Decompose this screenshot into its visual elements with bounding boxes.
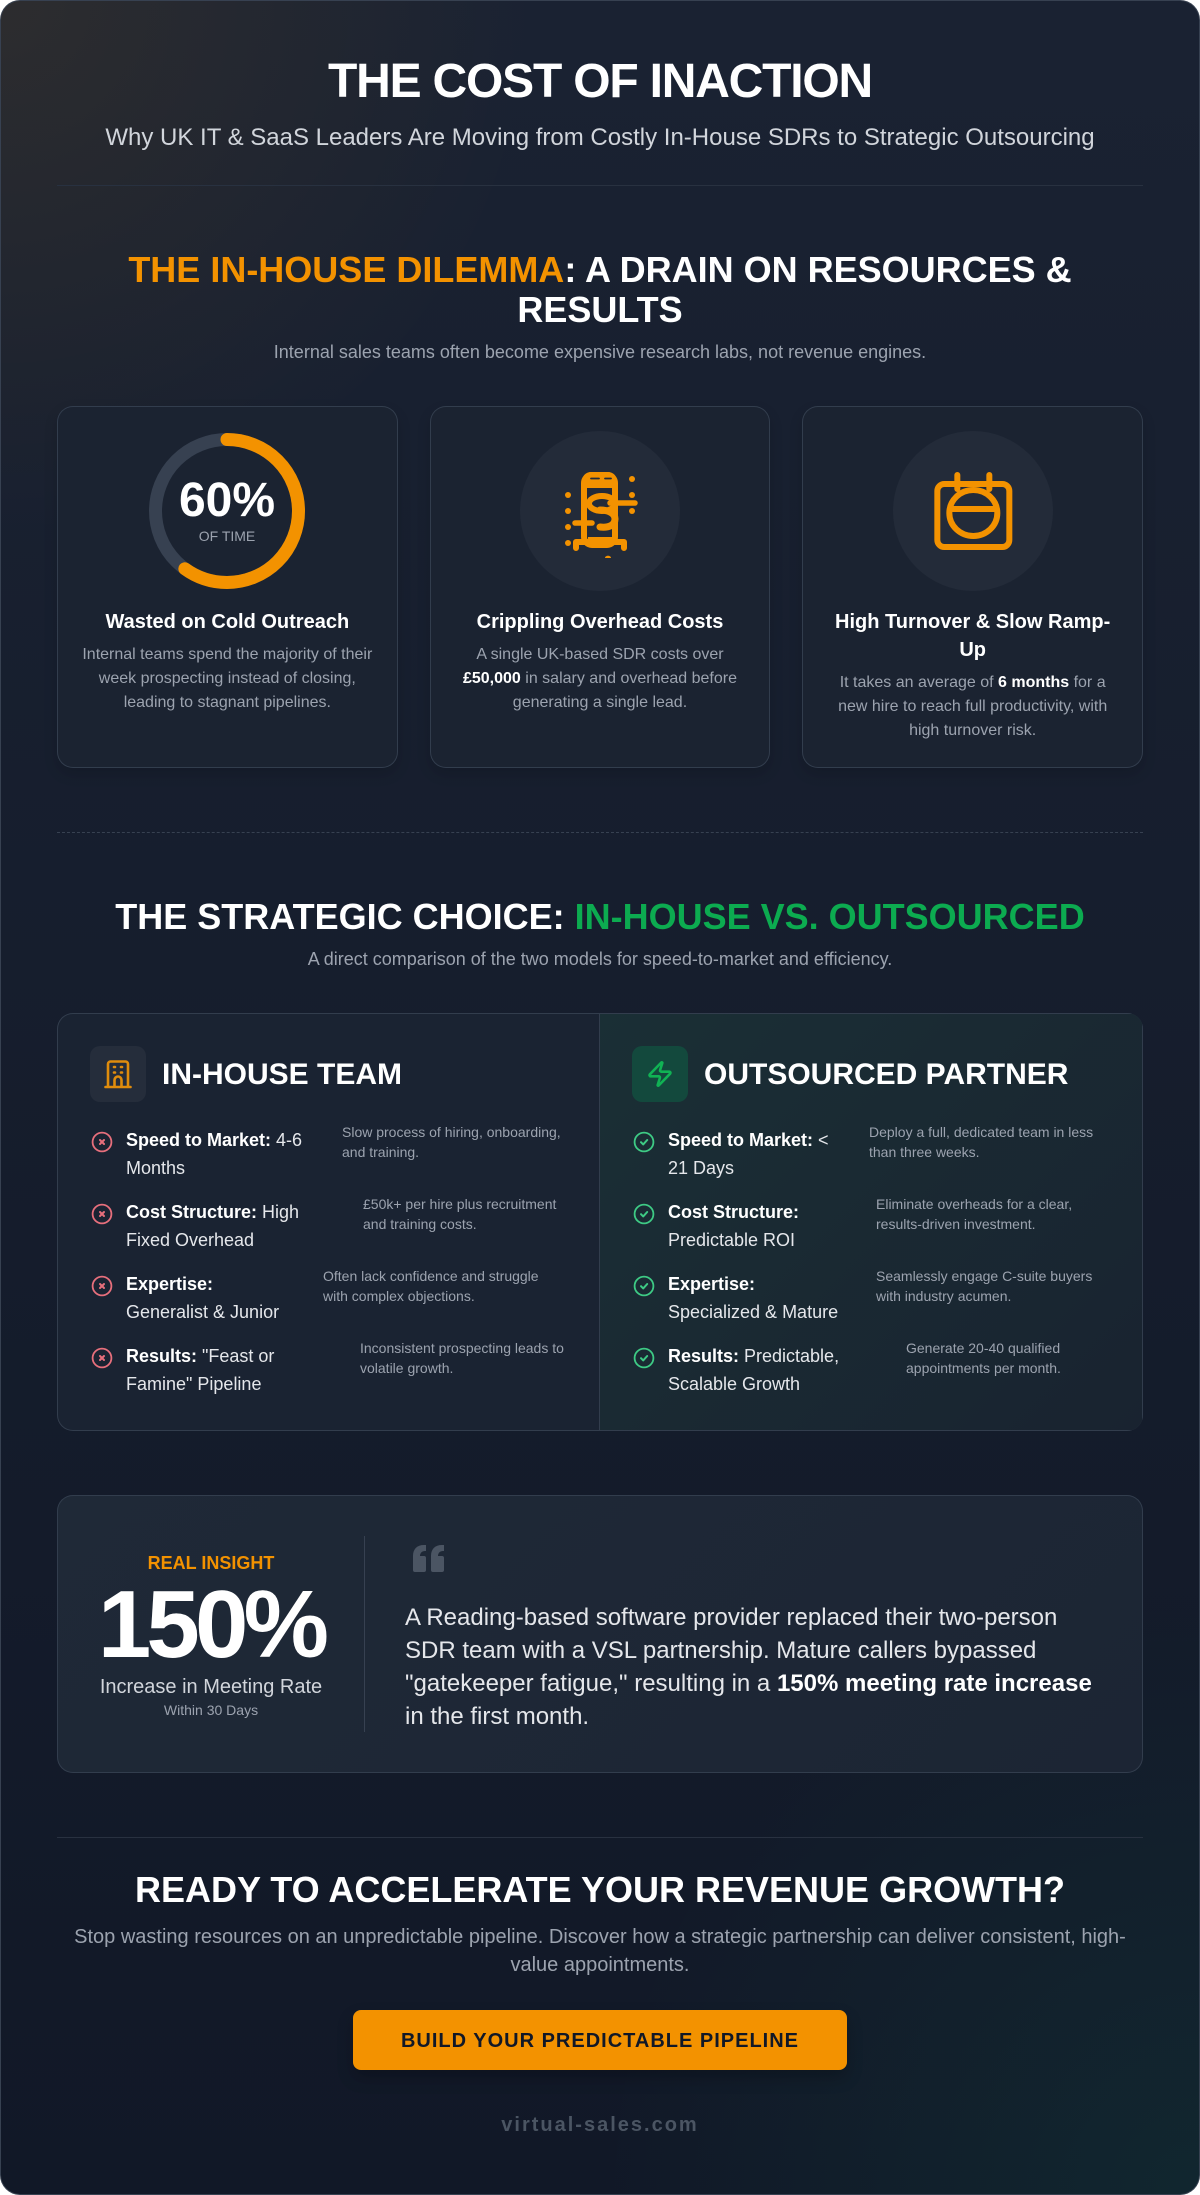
card text: A single UK-based SDR costs over xyxy=(476,646,724,663)
description xyxy=(363,1196,556,1232)
row: speed to market xyxy=(634,1124,1093,1178)
card title: High Turnover & Slow Ramp- xyxy=(835,611,1110,633)
panel: in-house team xyxy=(90,1046,564,1394)
icon: quote mark xyxy=(413,1545,444,1572)
icon: overhead cost xyxy=(520,431,680,591)
donut chart: 60% of time: OF TIME xyxy=(199,528,256,544)
label: Cost Structure: High xyxy=(126,1202,299,1222)
icon: cross xyxy=(92,1276,112,1296)
section subheading: Internal sales teams often become expensive research labs, not revenue engines. xyxy=(274,342,926,362)
panel heading: IN-HOUSE TEAM xyxy=(162,1058,402,1091)
heading: strategic choice: THE STRATEGIC CHOICE: IN-HOUSE VS. OUTSOURCED xyxy=(115,896,1085,937)
description: and training. xyxy=(342,1144,419,1160)
section subheading: A direct comparison of the two models for speed-to-market and efficiency. xyxy=(308,949,892,969)
description: appointments per month. xyxy=(906,1360,1061,1376)
subtitle: Why UK IT & SaaS Leaders Are Moving from Costly In-House SDRs to Strategic Outsourcing xyxy=(105,124,1095,151)
description: Often lack confidence and struggle xyxy=(323,1268,539,1284)
card text: week prospecting instead of closing, xyxy=(99,670,356,687)
description xyxy=(906,1340,1061,1376)
description: results-driven investment. xyxy=(876,1216,1036,1232)
row: cost structure xyxy=(634,1196,1072,1250)
quote text: in the first month. xyxy=(405,1703,589,1730)
card title: Up xyxy=(959,639,986,661)
label: Scalable Growth xyxy=(668,1374,800,1394)
description: than three weeks. xyxy=(869,1144,980,1160)
heading: call to action: READY TO ACCELERATE YOUR REVENUE GROWTH? xyxy=(135,1869,1065,1910)
description: and training costs. xyxy=(363,1216,477,1232)
label: Months xyxy=(126,1158,185,1178)
label: 21 Days xyxy=(668,1158,734,1178)
panel: wasted on cold outreach xyxy=(57,406,398,768)
description: volatile growth. xyxy=(360,1360,453,1376)
footer url: virtual-sales.com xyxy=(501,2114,699,2136)
call to action text: value appointments. xyxy=(510,1954,690,1976)
icon: building xyxy=(90,1046,146,1102)
row: cost structure xyxy=(92,1196,556,1250)
label: Famine" Pipeline xyxy=(126,1374,261,1394)
description: Eliminate overheads for a clear, xyxy=(876,1196,1072,1212)
panel heading: OUTSOURCED PARTNER xyxy=(704,1058,1068,1091)
call to action text: Stop wasting resources on an unpredictable pipeline. Discover how a strategic partnership can deliver consistent, high- xyxy=(74,1926,1126,1948)
card text: high turnover risk. xyxy=(909,722,1036,739)
quote text: A Reading-based software provider replaced their two-person xyxy=(405,1604,1057,1631)
label: Specialized & Mature xyxy=(668,1302,838,1322)
description: Inconsistent prospecting leads to xyxy=(360,1340,564,1356)
label xyxy=(126,1346,274,1394)
label: Expertise: xyxy=(668,1274,755,1294)
description xyxy=(876,1268,1092,1304)
description xyxy=(360,1340,564,1376)
card title: Crippling Overhead Costs xyxy=(477,611,723,633)
description: with industry acumen. xyxy=(876,1288,1011,1304)
description: £50k+ per hire plus recruitment xyxy=(363,1196,556,1212)
panel: comparison xyxy=(57,1013,1143,1431)
label xyxy=(126,1202,299,1250)
icon: cross xyxy=(92,1348,112,1368)
description: Seamlessly engage C-suite buyers xyxy=(876,1268,1092,1284)
row: expertise xyxy=(92,1268,539,1322)
label xyxy=(668,1202,799,1250)
description xyxy=(869,1124,1093,1160)
stat note: Within 30 Days xyxy=(164,1702,258,1718)
label xyxy=(126,1130,302,1178)
label xyxy=(668,1346,839,1394)
card text: leading to stagnant pipelines. xyxy=(124,694,331,711)
heading: in-house dilemma: RESULTS xyxy=(517,289,683,330)
icon: cross xyxy=(92,1132,112,1152)
card text: £50,000 in salary and overhead before xyxy=(463,670,737,687)
card text xyxy=(82,646,372,711)
donut chart: 60% of time xyxy=(149,433,305,589)
label xyxy=(668,1274,838,1322)
card text: It takes an average of 6 months for a xyxy=(840,674,1106,691)
button: BUILD YOUR PREDICTABLE PIPELINE xyxy=(401,2030,799,2052)
card title: Wasted on Cold Outreach xyxy=(105,611,349,633)
row: results xyxy=(634,1340,1061,1394)
panel: outsourced partner xyxy=(599,1013,1143,1431)
card text: new hire to reach full productivity, with xyxy=(838,698,1107,715)
label xyxy=(668,1130,829,1178)
description: with complex objections. xyxy=(323,1288,475,1304)
panel: high turnover and slow ramp-up xyxy=(802,406,1143,768)
icon: cross xyxy=(92,1204,112,1224)
card text xyxy=(838,674,1107,739)
description xyxy=(323,1268,539,1304)
stat block xyxy=(57,1535,365,1735)
icon: check xyxy=(634,1276,654,1296)
stat caption: Increase in Meeting Rate xyxy=(100,1676,322,1698)
label: Results: "Feast or xyxy=(126,1346,274,1366)
icon: check xyxy=(634,1132,654,1152)
big number: 150% xyxy=(98,1571,324,1678)
card text: Internal teams spend the majority of their xyxy=(82,646,372,663)
icon: check xyxy=(634,1204,654,1224)
icon: check xyxy=(634,1348,654,1368)
card text xyxy=(463,646,737,711)
title: THE COST OF INACTION xyxy=(328,55,872,108)
label: Generalist & Junior xyxy=(126,1302,279,1322)
panel: real insight xyxy=(57,1495,1143,1773)
label xyxy=(126,1274,279,1322)
label: Speed to Market: 4-6 xyxy=(126,1130,302,1150)
call to action text xyxy=(0,1923,1200,1979)
panel: crippling overhead costs xyxy=(430,406,770,768)
row: expertise xyxy=(634,1268,1092,1322)
label: REAL INSIGHT xyxy=(148,1553,274,1573)
heading: in-house dilemma xyxy=(128,249,1072,330)
card title xyxy=(835,611,1110,661)
label: Speed to Market: < xyxy=(668,1130,829,1150)
row: speed to market xyxy=(92,1124,561,1178)
donut chart: 60% of time: 60% xyxy=(179,474,275,527)
icon: calendar xyxy=(893,431,1053,591)
quote text: SDR team with a VSL partnership. Mature callers bypassed xyxy=(405,1637,1036,1664)
label: Predictable ROI xyxy=(668,1230,795,1250)
description: Slow process of hiring, onboarding, xyxy=(342,1124,561,1140)
label: Results: Predictable, xyxy=(668,1346,839,1366)
row: results xyxy=(92,1340,564,1394)
button xyxy=(353,2010,847,2070)
description: Deploy a full, dedicated team in less xyxy=(869,1124,1093,1140)
label: Fixed Overhead xyxy=(126,1230,254,1250)
description: Generate 20-40 qualified xyxy=(906,1340,1060,1356)
label: Cost Structure: xyxy=(668,1202,799,1222)
description xyxy=(876,1196,1072,1232)
heading: in-house dilemma: THE IN-HOUSE DILEMMA: A DRAIN ON RESOURCES & xyxy=(128,249,1072,290)
quote text xyxy=(405,1601,1092,1733)
description xyxy=(342,1124,561,1160)
quote text: "gatekeeper fatigue," resulting in a 150% meeting rate increase xyxy=(405,1670,1092,1697)
card text: generating a single lead. xyxy=(513,694,687,711)
icon: bolt xyxy=(632,1046,688,1102)
label: Expertise: xyxy=(126,1274,213,1294)
